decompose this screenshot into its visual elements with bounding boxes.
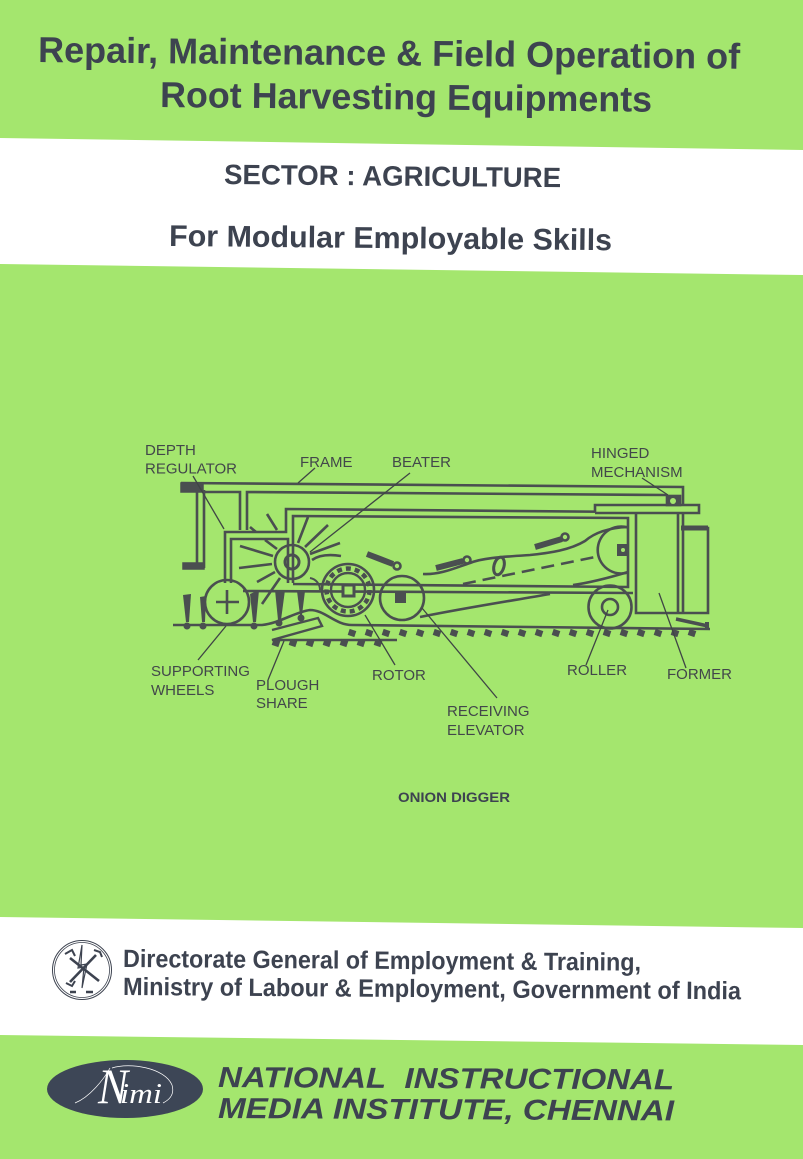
diagram labels — [145, 442, 732, 739]
directorate text — [123, 945, 742, 1005]
institute name — [218, 1062, 675, 1127]
former — [636, 513, 708, 629]
panel: top white band — [0, 138, 803, 275]
directorate text: Directorate General of Employment & Training, — [123, 945, 641, 977]
label: former: FORMER — [667, 666, 732, 683]
icon: DGET emblem — [52, 940, 112, 1000]
label: depth regulator: DEPTH — [145, 442, 196, 459]
label: rotor: ROTOR — [372, 667, 426, 684]
title: Root Harvesting Equipments — [160, 74, 652, 120]
ground and hatching — [173, 610, 710, 646]
beater — [239, 514, 341, 604]
soil blades — [183, 590, 305, 630]
institute name: NATIONAL INSTRUCTIONAL — [218, 1062, 674, 1096]
roller — [588, 586, 632, 628]
label: frame: FRAME — [300, 454, 352, 471]
label: hinged mechanism: MECHANISM — [591, 464, 683, 481]
label: receiving elevator: RECEIVING — [447, 703, 530, 720]
logo: Nimi oval — [47, 1058, 203, 1118]
receiving elevator — [367, 526, 628, 620]
hinged mechanism joint — [667, 496, 680, 505]
label: hinged mechanism: HINGED — [591, 445, 649, 462]
diagram caption: ONION DIGGER — [398, 789, 510, 805]
logo: Nimi oval: N — [97, 1058, 130, 1114]
sector heading: SECTOR : AGRICULTURE — [224, 159, 561, 193]
leader lines — [193, 468, 686, 698]
frame — [181, 483, 699, 593]
label: receiving elevator: ELEVATOR — [447, 722, 525, 739]
label: depth regulator: REGULATOR — [145, 460, 237, 478]
logo: Nimi oval: imi — [120, 1079, 162, 1110]
title: Repair, Maintenance & Field Operation of — [38, 29, 741, 77]
label: plough share: SHARE — [256, 695, 308, 712]
directorate text: Ministry of Labour & Employment, Government of India — [123, 973, 742, 1005]
label: roller: ROLLER — [567, 662, 627, 679]
label: beater: BEATER — [392, 454, 451, 471]
supporting wheel — [205, 580, 249, 624]
label: plough share: PLOUGH — [256, 677, 319, 694]
label: supporting wheels: SUPPORTING — [151, 663, 250, 680]
label: supporting wheels: WHEELS — [151, 682, 214, 699]
institute name: MEDIA INSTITUTE, CHENNAI — [218, 1093, 675, 1127]
panel: bottom white band — [0, 917, 803, 1045]
subtitle: For Modular Employable Skills — [169, 220, 612, 257]
title — [38, 29, 741, 120]
diagram: onion digger — [173, 468, 710, 698]
rotor — [322, 564, 374, 616]
